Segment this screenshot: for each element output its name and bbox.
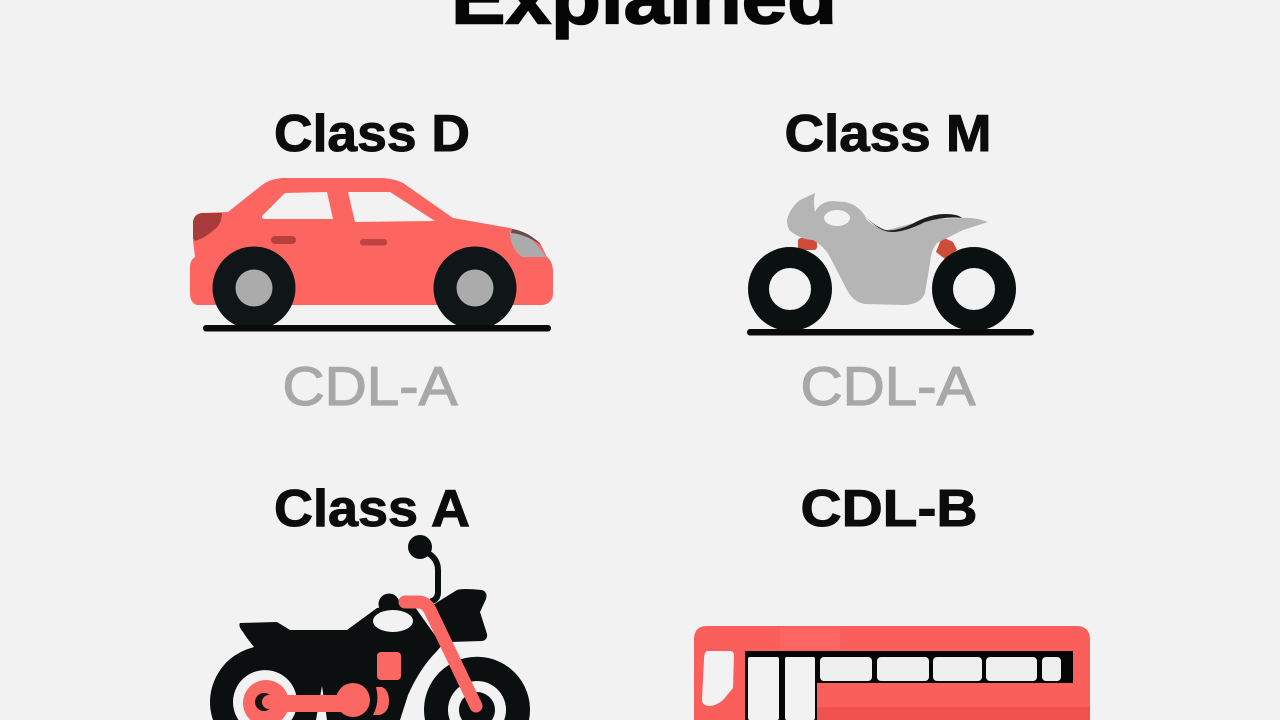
icon: car bbox=[190, 178, 553, 332]
panel: class D bbox=[190, 105, 553, 417]
panel: class A bbox=[210, 480, 530, 720]
icon: motorcycle bbox=[210, 535, 530, 720]
label: CDL-A: CDL-A bbox=[800, 355, 976, 417]
heading: class D: Class D bbox=[274, 105, 470, 163]
heading: class A: Class A bbox=[274, 480, 470, 538]
panel: class M bbox=[747, 105, 1034, 417]
icon: bus bbox=[694, 626, 1090, 720]
panel: CDL-B bbox=[694, 480, 1090, 720]
label: CDL-A: CDL-A bbox=[282, 355, 458, 417]
icon: sport motorcycle bbox=[747, 193, 1034, 336]
heading: class M: Class M bbox=[784, 105, 992, 163]
heading: CDL-B: CDL-B bbox=[800, 480, 978, 538]
